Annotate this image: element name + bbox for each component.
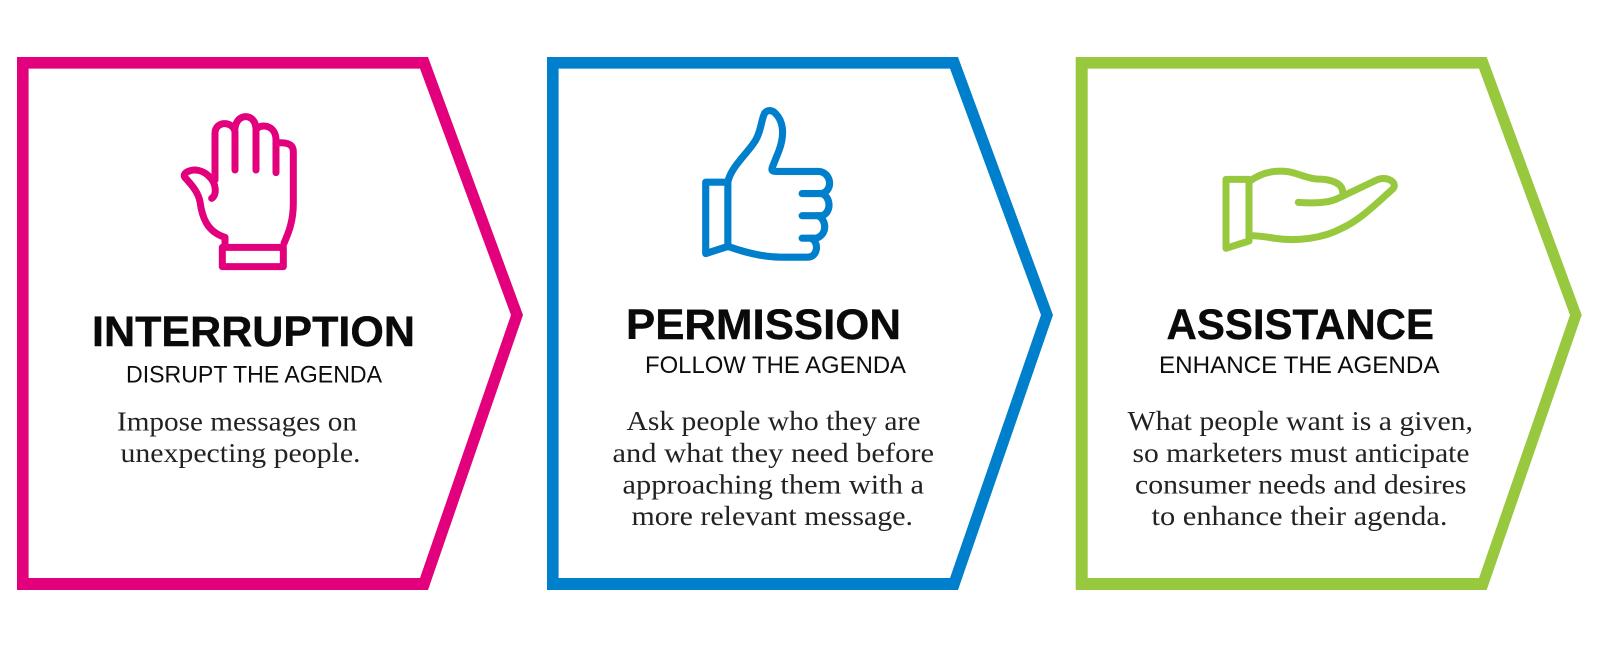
icon: raised hand [184, 117, 293, 267]
subheading: follow the agenda: FOLLOW THE AGENDA [645, 352, 907, 379]
heading: assistance: ASSISTANCE [1166, 301, 1434, 349]
description: assistance: What people want is a given, [1128, 405, 1473, 436]
panel: assistance [1076, 57, 1582, 590]
description: permission: and what they need before [612, 437, 934, 468]
icon: thumbs up [706, 111, 830, 257]
description: interruption [117, 406, 360, 468]
panel: permission [547, 57, 1053, 590]
subheading: enhance the agenda: ENHANCE THE AGENDA [1159, 352, 1440, 379]
description: interruption: Impose messages on [117, 406, 357, 436]
description: assistance: consumer needs and desires [1135, 468, 1466, 500]
description: permission: more relevant message. [632, 500, 913, 531]
subheading: disrupt the agenda: DISRUPT THE AGENDA [126, 362, 383, 388]
heading: interruption: INTERRUPTION [92, 308, 415, 356]
chevron outline: interruption [17, 57, 523, 590]
description: assistance: to enhance their agenda. [1152, 500, 1448, 531]
description: permission: approaching them with a [622, 468, 924, 500]
description: permission [612, 405, 934, 531]
chevron outline: assistance [1076, 57, 1582, 590]
description: interruption: unexpecting people. [120, 437, 360, 468]
panel: interruption [17, 57, 523, 590]
description: assistance: so marketers must anticipate [1132, 437, 1470, 468]
description: permission: Ask people who they are [626, 405, 920, 436]
heading: permission: PERMISSION [626, 301, 901, 349]
icon: open hand [1226, 171, 1394, 248]
chevron outline: permission [547, 57, 1053, 590]
description: assistance [1128, 405, 1473, 531]
